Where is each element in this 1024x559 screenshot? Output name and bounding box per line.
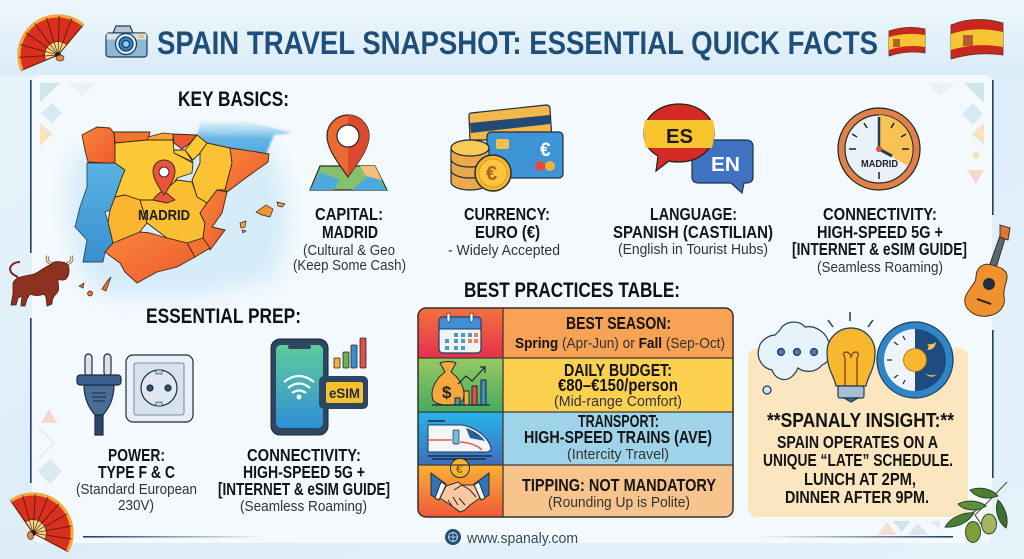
block: power: (Standard European [76, 481, 197, 498]
block: connectivity bottom: (Seamless Roaming) [240, 498, 367, 515]
row: tipping [418, 458, 733, 517]
icon: Madrid pin [153, 160, 175, 195]
region: Navarra and Rioja [174, 135, 207, 162]
icon: Madrid clock [838, 108, 920, 190]
block: capital: CAPITAL: [315, 204, 383, 224]
icon: money bag and chart: $ [442, 383, 452, 402]
icon: olive branch [945, 482, 1007, 542]
block: connectivity bottom: [INTERNET & eSIM GUIDE] [218, 479, 390, 499]
region: Aragon [192, 143, 232, 203]
region: Cantabria [148, 133, 173, 140]
callout: Spanaly insight: SPAIN OPERATES ON A [777, 432, 938, 452]
icon: ES / EN speech bubbles: ES [666, 126, 693, 148]
block: capital: (Keep Some Cash) [293, 257, 406, 274]
icon: cards and coins [451, 105, 563, 191]
icon: map pin [310, 115, 387, 190]
row: transport [418, 411, 733, 465]
section: best practices heading: BEST PRACTICES TABLE: [464, 279, 680, 302]
icon: money bag and chart [432, 362, 490, 405]
region: Madrid [153, 190, 175, 203]
block: power: POWER: [108, 445, 165, 465]
icon: ES / EN speech bubbles: EN [711, 154, 740, 176]
header band [0, 0, 1024, 75]
region: Castile and Leon [115, 140, 193, 200]
callout: Spanaly insight [748, 312, 968, 517]
block: capital [293, 115, 406, 274]
row: tipping: (Rounding Up is Polite) [548, 494, 690, 511]
icon: high-speed train [428, 421, 492, 459]
row: transport: TRANSPORT: [578, 411, 659, 431]
icon: day and night dial [877, 322, 953, 398]
section: essential prep heading: ESSENTIAL PREP: [146, 305, 301, 328]
icon: thought cloud [758, 322, 831, 394]
icon: handshake and coin [431, 458, 489, 512]
icon: Madrid clock: MADRID [861, 159, 898, 170]
region: Andalusia [105, 232, 195, 283]
islands [256, 205, 273, 217]
row: daily budget: DAILY BUDGET: [564, 360, 672, 380]
block: language: LANGUAGE: [650, 204, 737, 224]
icon: guitar [965, 225, 1010, 316]
icon: ES / EN speech bubbles [644, 104, 753, 193]
block: connectivity bottom [218, 338, 390, 515]
block: connectivity top: [INTERNET & eSIM GUIDE] [792, 239, 967, 259]
icon: small Spanish flag [889, 27, 925, 56]
region: Catalonia [225, 148, 269, 192]
region: Valencia [200, 190, 227, 250]
region: Castilla-La Mancha [140, 180, 207, 243]
block: capital: (Cultural & Geo [303, 242, 395, 259]
block: connectivity bottom: HIGH-SPEED 5G + [243, 462, 365, 482]
region: Asturias [114, 132, 150, 143]
block: connectivity top: HIGH-SPEED 5G + [817, 222, 943, 242]
row: daily budget: €80–€150/person [558, 375, 678, 395]
icon: bull [10, 256, 72, 306]
block: connectivity top [792, 108, 967, 276]
table: best practices [418, 308, 733, 517]
block: language [613, 104, 773, 258]
block: connectivity top: CONNECTIVITY: [823, 204, 937, 224]
region: Extremadura [108, 195, 147, 243]
icon: camera [106, 26, 147, 57]
block: connectivity bottom: CONNECTIVITY: [247, 445, 361, 465]
row: best season: Spring (Apr-Jun) or Fall (Sep-Oct) [515, 335, 725, 352]
footer: website: www.spanaly.com [466, 530, 578, 547]
block: language: (English in Tourist Hubs) [618, 241, 768, 258]
main content panel [32, 75, 992, 543]
row: best season: BEST SEASON: [566, 313, 671, 333]
icon: light bulb [827, 312, 875, 402]
icon: handshake and coin: € [456, 462, 463, 476]
block: currency: EURO (€) [475, 222, 540, 242]
block: power: TYPE F & C [98, 462, 175, 482]
region: Portugal [75, 163, 125, 262]
callout: Spanaly insight: LUNCH AT 2PM, [804, 469, 916, 489]
icon: large Spanish flag [951, 19, 1003, 59]
block: capital: MADRID [322, 222, 378, 242]
row: daily budget: (Mid-range Comfort) [554, 393, 682, 410]
callout: Spanaly insight: UNIQUE “LATE” SCHEDULE. [763, 450, 953, 470]
icon: red fan bottom left [10, 487, 76, 559]
section: key basics heading: KEY BASICS: [178, 88, 289, 111]
block: power: 230V) [118, 497, 154, 514]
map: Iberian peninsula [68, 122, 292, 297]
region: Basque Country [173, 134, 197, 149]
region: Murcia [187, 238, 210, 257]
icon: phone with eSIM [271, 338, 368, 435]
title: SPAIN TRAVEL SNAPSHOT: ESSENTIAL QUICK FACTS [157, 25, 878, 61]
block: currency: CURRENCY: [464, 204, 550, 224]
icon: calendar [439, 313, 481, 353]
icon: red fan top left [19, 16, 83, 70]
icon: plug and socket [77, 354, 193, 435]
row: transport: HIGH-SPEED TRAINS (AVE) [524, 427, 712, 447]
row: tipping: TIPPING: NOT MANDATORY [522, 475, 716, 495]
row: best season [418, 308, 733, 358]
region: Galicia [82, 127, 115, 163]
block: currency: - Widely Accepted [448, 242, 560, 259]
block: currency [448, 105, 563, 259]
icon: cards and coins: € [486, 163, 497, 185]
icon: cards and coins: € [540, 140, 551, 161]
map label: Madrid: MADRID [138, 207, 190, 224]
decorative frame [30, 80, 994, 538]
callout: Spanaly insight: DINNER AFTER 9PM. [785, 487, 929, 507]
block: power [76, 354, 197, 514]
icon: phone with eSIM: eSIM [329, 385, 360, 401]
row: daily budget [418, 358, 733, 412]
block: connectivity top: (Seamless Roaming) [817, 259, 943, 276]
callout: Spanaly insight: **SPANALY INSIGHT:** [767, 410, 954, 432]
block: language: SPANISH (CASTILIAN) [613, 222, 773, 242]
row: transport: (Intercity Travel) [567, 446, 669, 463]
